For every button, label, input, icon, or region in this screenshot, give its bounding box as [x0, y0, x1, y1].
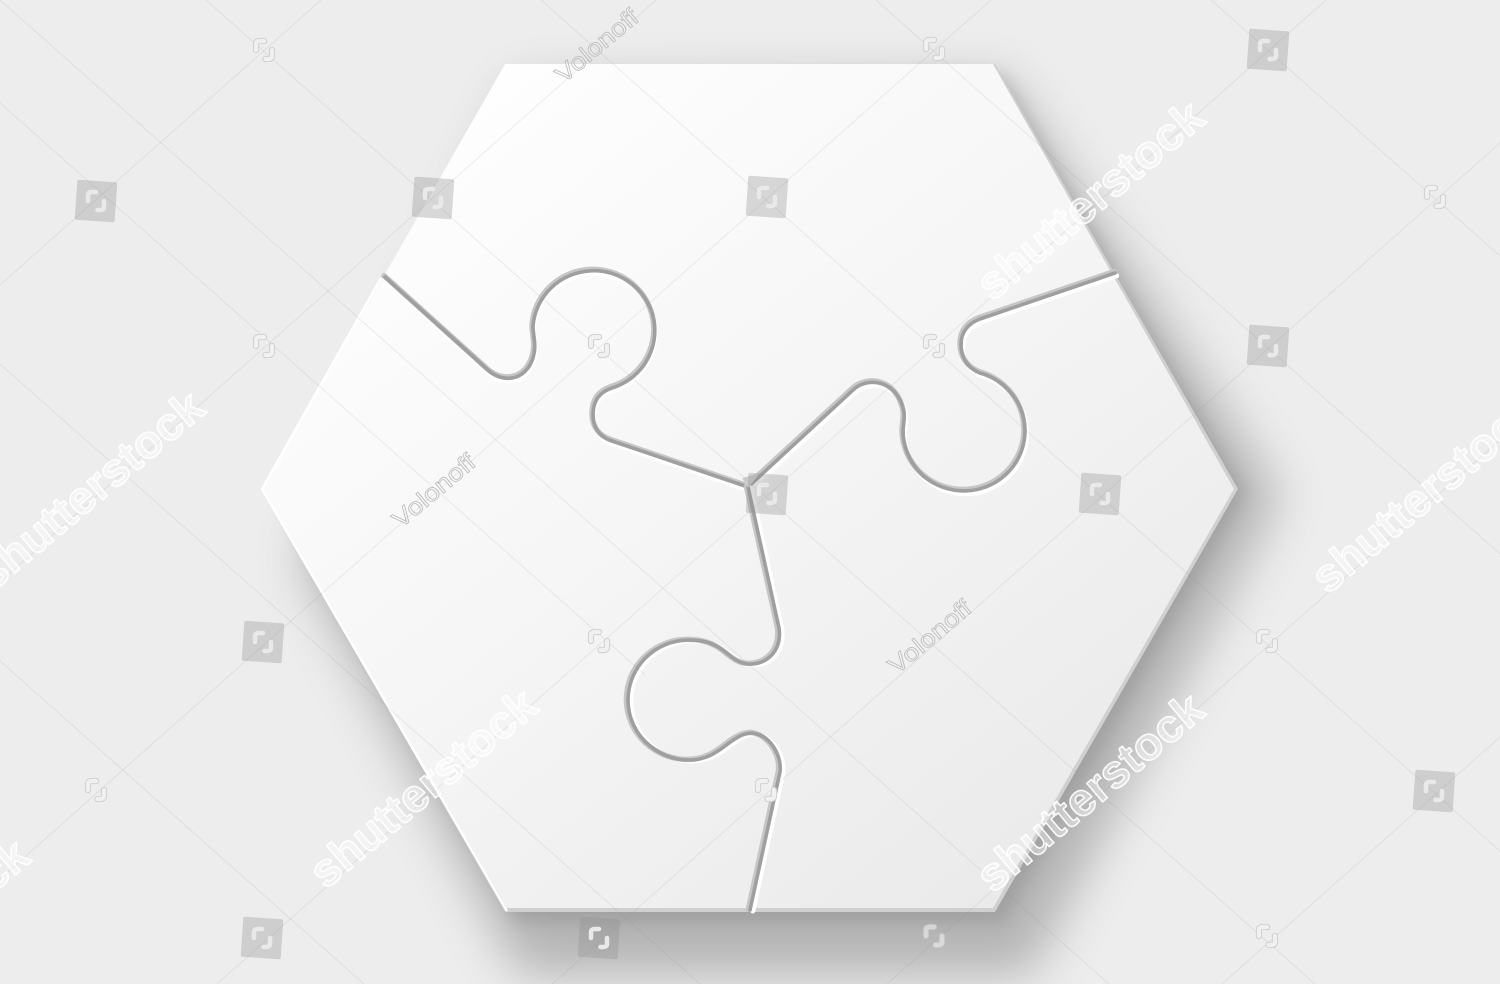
hexagon puzzle — [262, 64, 1238, 912]
left edge highlights — [262, 278, 507, 911]
watermark: Volonoff credits: Volonoff — [883, 595, 977, 680]
seam: right piece — [747, 272, 1117, 494]
hexagon rim — [262, 64, 1238, 912]
watermark: Volonoff credits: Volonoff — [550, 4, 644, 89]
watermark: shutterstock wordmarks: shutterstock — [299, 678, 547, 898]
watermark: shutterstock wordmarks: shutterstock — [966, 682, 1214, 902]
seam: bottom piece — [626, 486, 783, 911]
watermark: Volonoff credits — [387, 4, 977, 680]
centre junction facet — [742, 473, 760, 488]
watermark: Volonoff credits: Volonoff — [387, 449, 481, 534]
seam: left piece — [384, 269, 748, 490]
hexagon top face — [262, 64, 1234, 908]
hexagon drop shadow — [285, 75, 1280, 975]
watermark: shutterstock wordmarks: shutterstock — [966, 90, 1214, 310]
